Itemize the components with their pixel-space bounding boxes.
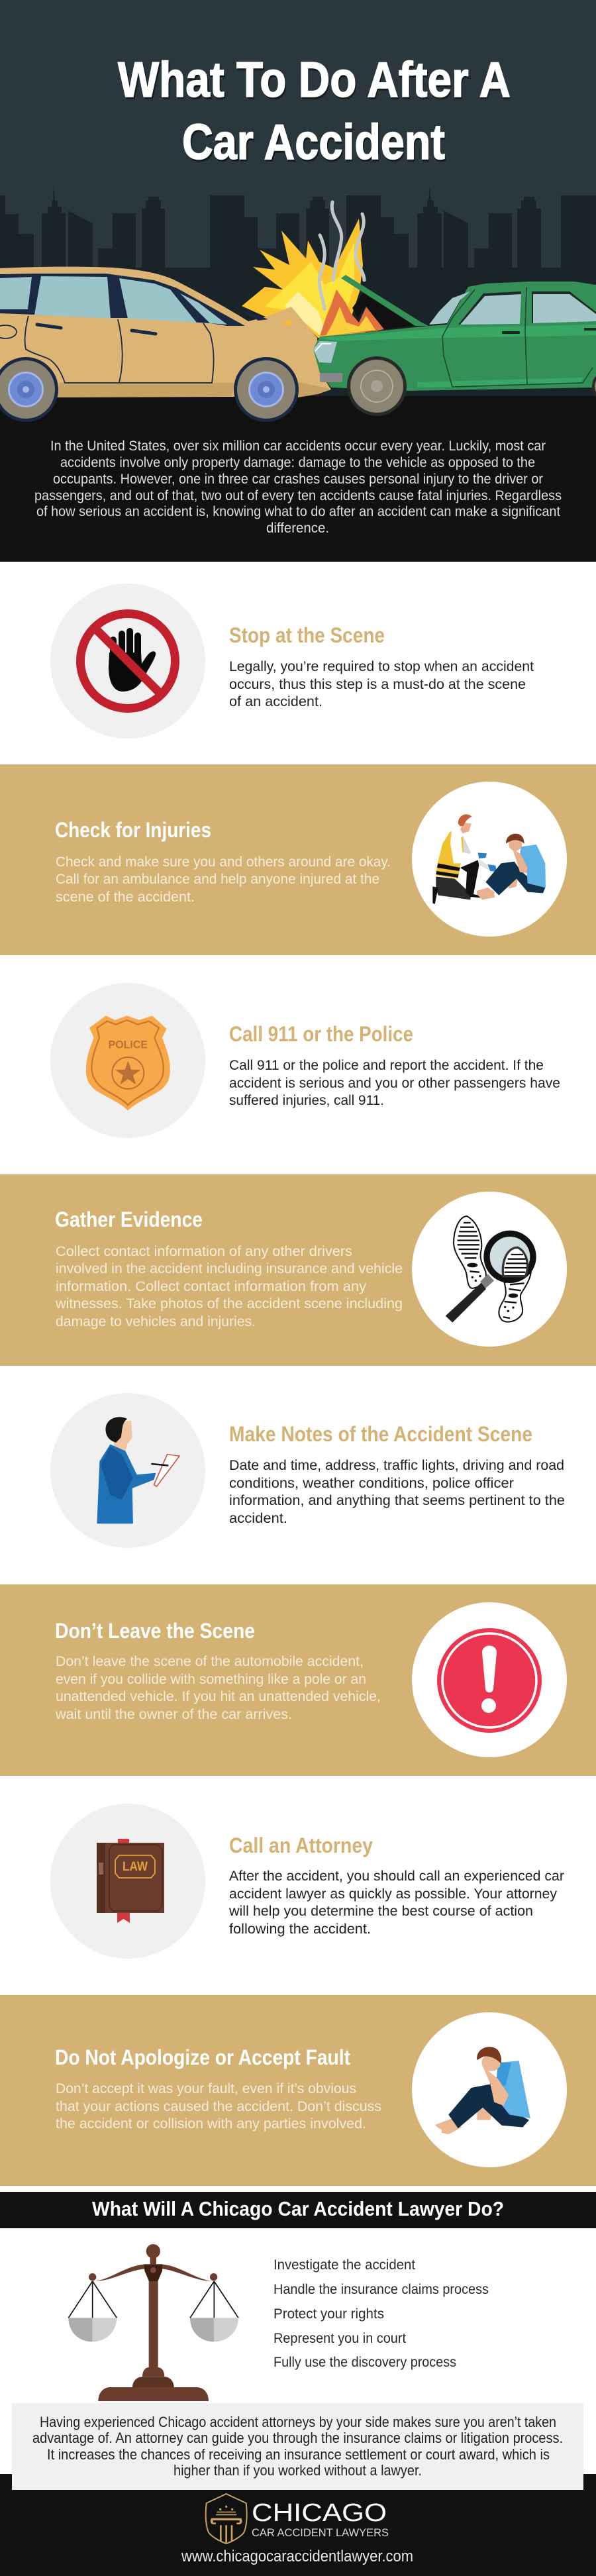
text block: unattended vehicle. If you hit an unattended vehicle, [56, 1689, 381, 1704]
heading: Check for Injuries [55, 818, 211, 842]
text block: following the accident. [229, 1922, 371, 1937]
text block: accident is serious and you or other passengers have [229, 1076, 560, 1091]
callout box: higher than if you worked without a lawyer. [174, 2462, 422, 2479]
text block [229, 1058, 560, 1108]
intro text [34, 438, 562, 536]
text block: accident. [229, 1511, 287, 1526]
callout box [12, 2403, 583, 2490]
text block: information. Collect contact information from any [56, 1279, 367, 1294]
icon: explosion [242, 202, 384, 338]
text block: suffered injuries, call 911. [229, 1093, 384, 1108]
text block: the accident or collision with any parties involved. [56, 2116, 366, 2132]
panel: call 911 [50, 983, 560, 1138]
panel: call an attorney [50, 1804, 564, 1959]
text block: Legally, you’re required to stop when an accident [229, 659, 534, 674]
text block: Don’t accept it was your fault, even if it’s obvious [56, 2081, 356, 2096]
heading: Make Notes of the Accident Scene [229, 1422, 532, 1446]
text block: information, and anything that seems pertinent to the [229, 1493, 565, 1508]
panel: don't leave the scene [0, 1584, 596, 1776]
text block [56, 2081, 381, 2132]
text block: even if you collide with something like a pole or an [56, 1672, 366, 1687]
icon: man taking notes [50, 1393, 205, 1548]
text block: lawyer duties list: Represent you in court [273, 2331, 406, 2346]
logo wordmark [252, 2499, 389, 2539]
icon: police badge: POLICE [109, 1038, 148, 1051]
panel: footer [0, 2403, 596, 2576]
website url: www.chicagocaraccidentlawyer.com [181, 2548, 413, 2565]
icon: logo shield [206, 2494, 247, 2544]
icon: law book [50, 1804, 205, 1959]
logo wordmark: CAR ACCIDENT LAWYERS [252, 2526, 389, 2539]
text block: lawyer duties list: Investigate the accident [273, 2257, 415, 2273]
text block: Don’t leave the scene of the automobile accident, [56, 1654, 364, 1669]
title [118, 52, 511, 172]
panel: make notes [50, 1393, 565, 1548]
icon: police badge [50, 983, 205, 1138]
heading: Call 911 or the Police [229, 1022, 413, 1046]
text block: will help you determine the best course of action [228, 1904, 533, 1919]
panel: do not apologize [0, 1995, 596, 2186]
panel: stop at the scene [50, 584, 534, 739]
text block: Collect contact information of any other drivers [56, 1244, 352, 1259]
text block: accident lawyer as quickly as possible. Your attorney [229, 1886, 557, 1902]
icon: tan car [0, 267, 331, 422]
text block: Call 911 or the police and report the accident. If the [229, 1058, 544, 1073]
text block: lawyer duties list: Handle the insurance claims process [273, 2282, 489, 2297]
panel: gather evidence [0, 1174, 596, 1366]
heading: Call an Attorney [229, 1833, 373, 1857]
heading: Stop at the Scene [229, 623, 385, 647]
panel: header scene [0, 0, 596, 562]
text block: that your actions caused the accident. Don’t discuss [56, 2099, 381, 2114]
icon: medic helping injured person [412, 782, 567, 937]
icon: exclamation [412, 1602, 567, 1757]
intro text: In the United States, over six million car accidents occur every year. Luckily, most car [50, 438, 546, 454]
panel: lawyer heading bar: What Will A Chicago Car Accident Lawyer Do? [92, 2197, 504, 2220]
text block [229, 1458, 565, 1526]
text block [55, 1244, 403, 1329]
intro text: occupants. However, one in three car crashes causes personal injury to the driver or [53, 472, 543, 487]
icon: stop hand [50, 584, 205, 739]
title: Car Accident [182, 114, 445, 170]
text block: wait until the owner of the car arrives. [55, 1707, 292, 1722]
text block [228, 1869, 564, 1937]
heading: Don’t Leave the Scene [55, 1619, 255, 1643]
text block: lawyer duties list: Fully use the discovery process [273, 2355, 456, 2370]
icon: scales of justice [68, 2244, 238, 2401]
text block: lawyer duties list [273, 2257, 489, 2370]
icon: green car [313, 275, 596, 416]
text block: occurs, thus this step is a must-do at the scene [229, 677, 526, 692]
title: Car Accident [183, 116, 446, 172]
intro text: accidents involve only property damage: damage to the vehicle as opposed to the [60, 455, 535, 470]
text block: Date and time, address, traffic lights, driving and road [229, 1458, 564, 1473]
text block: Check and make sure you and others around are okay. [56, 854, 391, 870]
intro text: passengers, and out of that, two out of every ten accidents cause fatal injuries. Regardless [34, 488, 562, 503]
icon: sad man [412, 2012, 567, 2167]
text block: of an accident. [229, 694, 323, 709]
logo wordmark: CHICAGO [252, 2499, 387, 2527]
heading: Do Not Apologize or Accept Fault [55, 2045, 350, 2069]
title: What To Do After A [119, 54, 511, 109]
icon: footprints and magnifier [412, 1192, 567, 1347]
text block [229, 659, 534, 709]
callout box: It increases the chances of receiving an insurance settlement or court award, which is [47, 2446, 550, 2463]
text block [56, 854, 391, 905]
intro text: of how serious an accident is, knowing what to do after an accident can make a significant [36, 504, 560, 519]
text block: Call for an ambulance and help anyone injured at the [56, 872, 379, 887]
text block [55, 1654, 381, 1722]
text block: involved in the accident including insurance and vehicle [56, 1261, 403, 1276]
skyline [0, 185, 596, 268]
text block: After the accident, you should call an experienced car [229, 1869, 564, 1884]
heading: Gather Evidence [55, 1208, 203, 1231]
panel: lawyer heading bar [0, 2192, 596, 2228]
text block: damage to vehicles and injuries. [56, 1314, 256, 1329]
text block: scene of the accident. [56, 890, 195, 905]
icon: law book: LAW [123, 1860, 148, 1874]
panel: check for injuries [0, 764, 596, 955]
title: What To Do After A [118, 52, 511, 107]
text block: lawyer duties list: Protect your rights [273, 2306, 384, 2322]
intro text: difference. [266, 521, 329, 536]
text block: conditions, weather conditions, police officer [229, 1476, 514, 1491]
text block: witnesses. Take photos of the accident scene including [55, 1296, 403, 1312]
